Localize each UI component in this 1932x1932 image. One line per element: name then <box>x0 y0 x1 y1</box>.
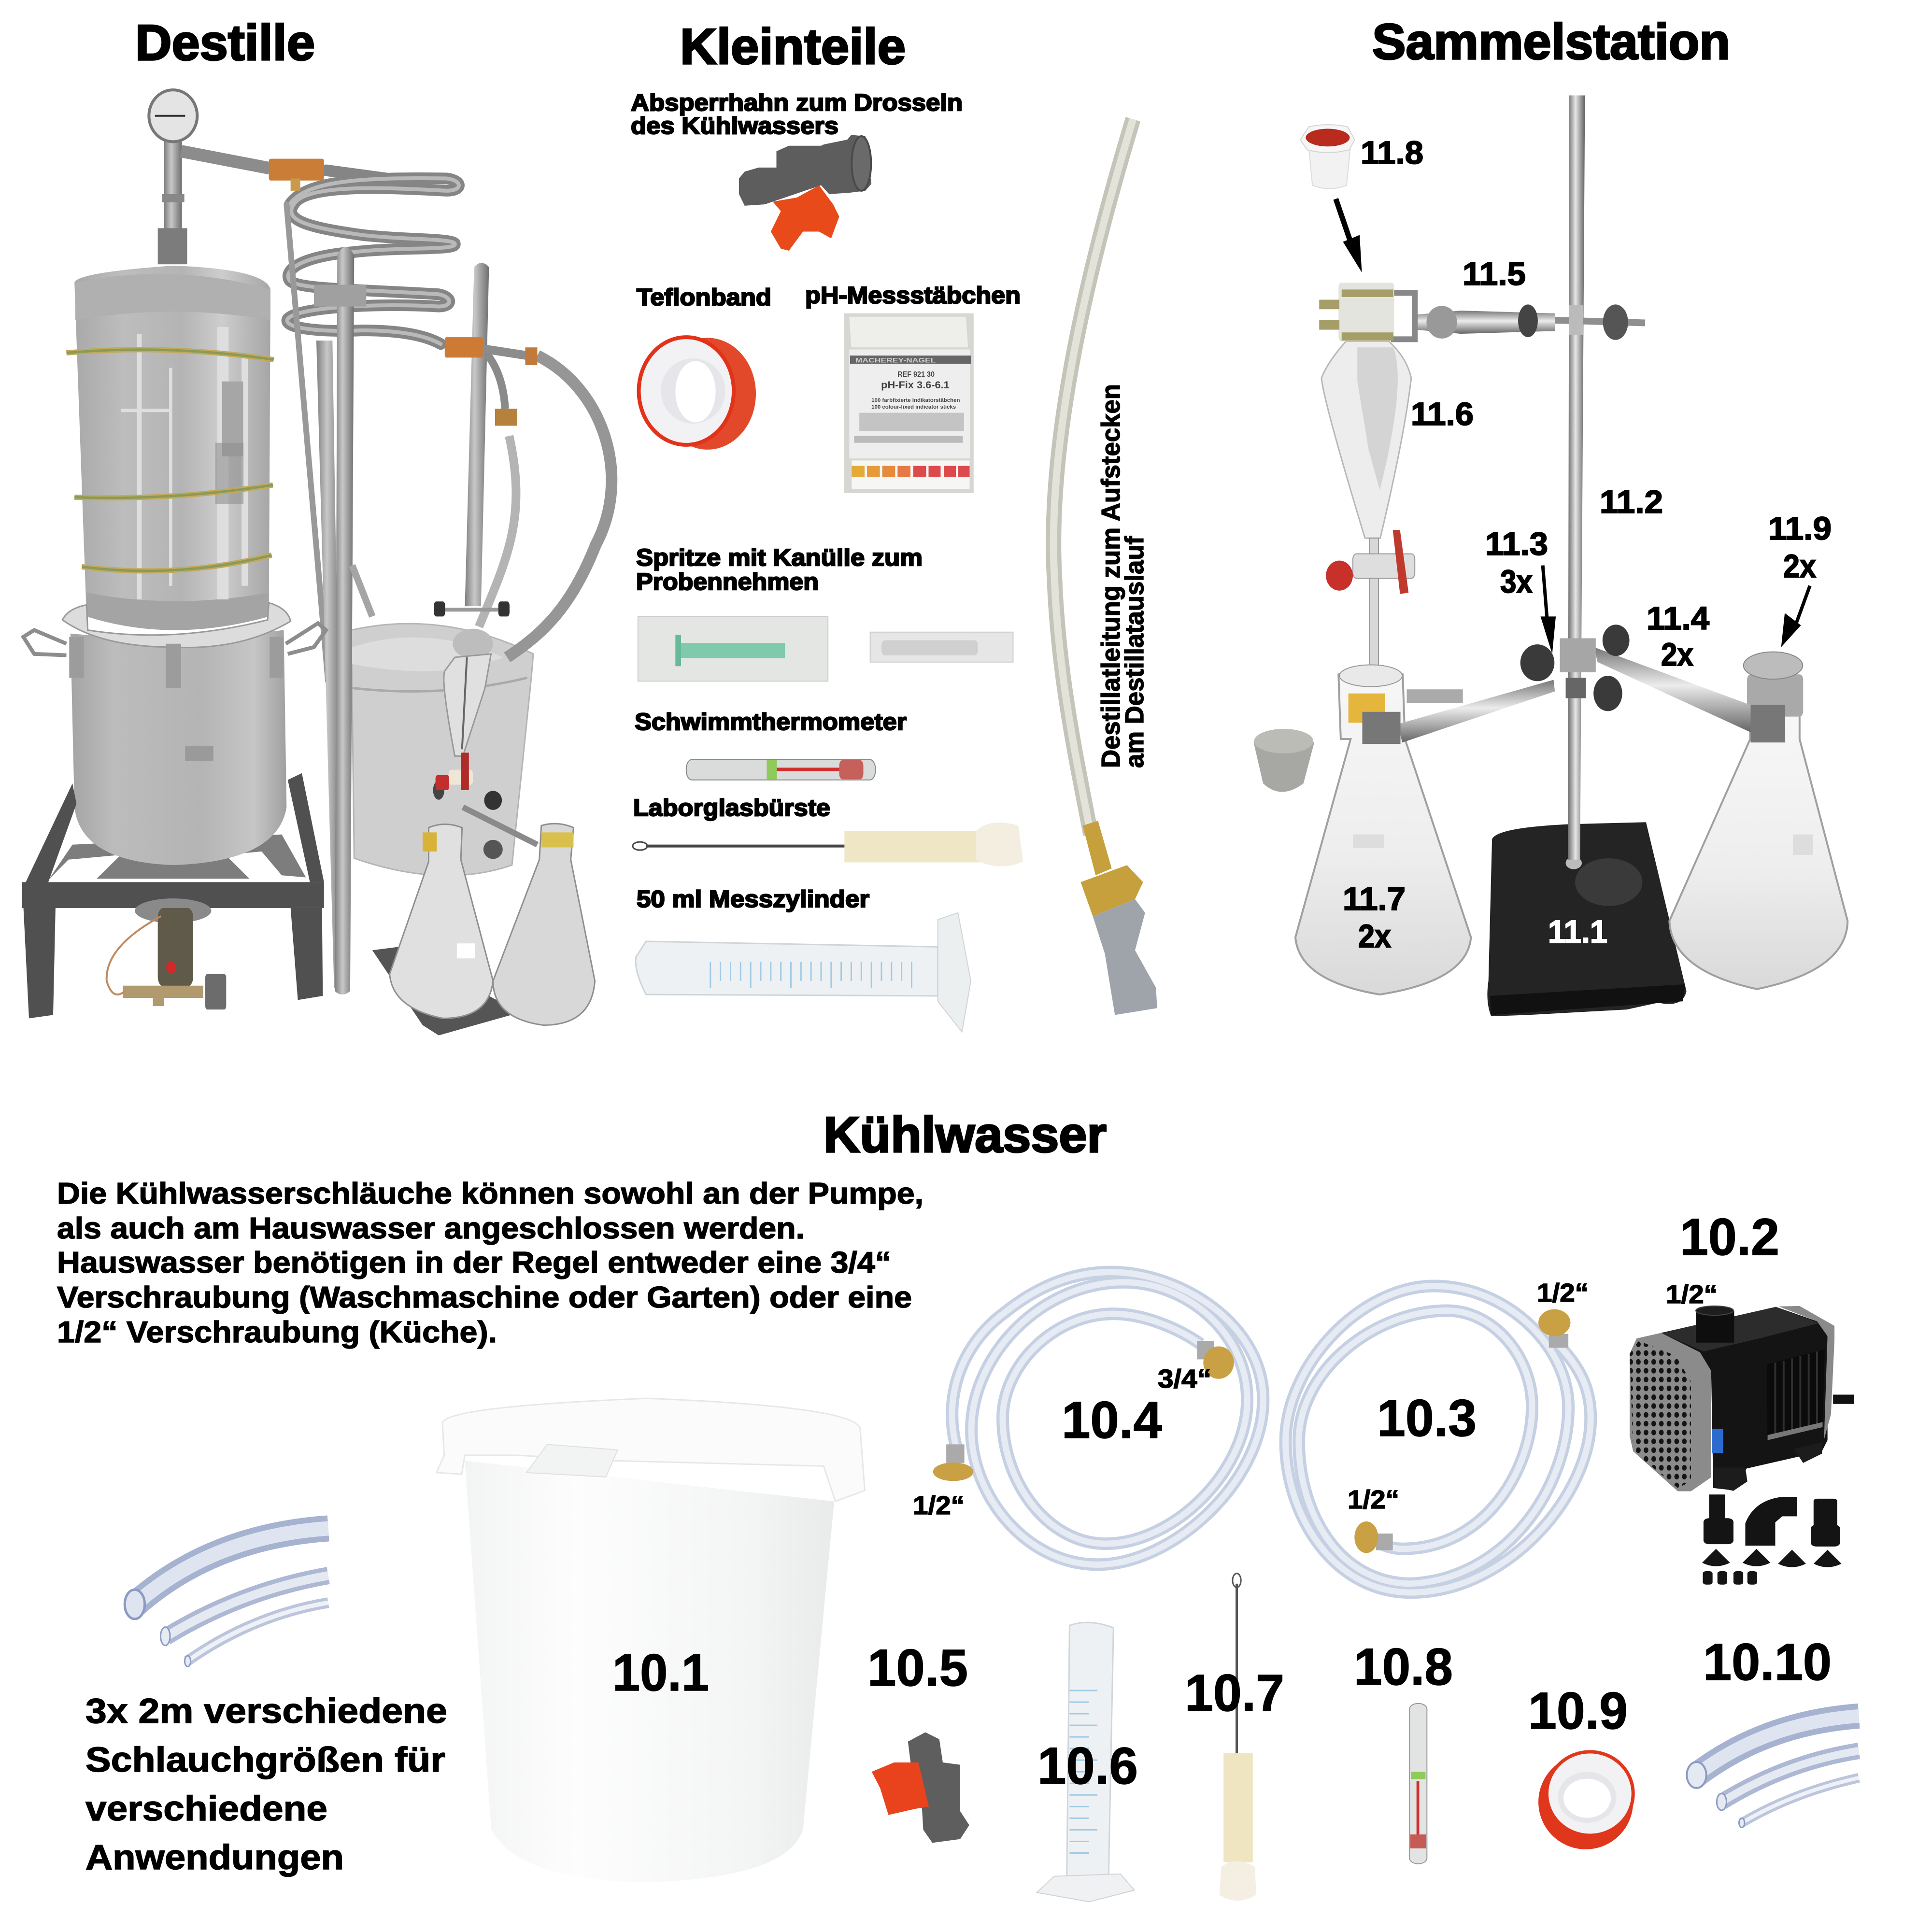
handles <box>23 630 66 655</box>
label: 11.7: 11.7 <box>1343 881 1406 917</box>
arrow 11.9 <box>1781 586 1810 647</box>
left arm <box>1398 680 1555 742</box>
label: Spritze: Spritze mit Kanülle zum <box>636 545 923 571</box>
panel: Sammelstation <box>1254 14 1847 1016</box>
text block: intro: Die Kühlwasserschläuche können sowohl an der Pumpe, <box>57 1177 923 1210</box>
brush 10.7 <box>1220 1574 1256 1901</box>
stand base <box>1487 822 1687 1016</box>
ropes <box>66 350 274 571</box>
label: 1/2 inch left: 1/2“ <box>913 1491 965 1520</box>
hoses <box>507 355 611 657</box>
clamp arm 11.5 <box>1416 311 1555 334</box>
teflon tape 10.9 <box>1538 1752 1633 1849</box>
label: Schwimmthermometer: Schwimmthermometer <box>635 709 907 735</box>
stand rear rails <box>48 835 306 880</box>
illustration: still assembly <box>22 90 611 1036</box>
label: 10.9: 10.9 <box>1528 1681 1628 1740</box>
label: 10.4: 10.4 <box>1062 1391 1162 1449</box>
label: pH-Messstaebchen: pH-Messstäbchen <box>805 283 1021 309</box>
brass coupling <box>1083 821 1112 875</box>
illustration: tubes and bucket <box>125 1398 865 1882</box>
pH test strips: pH-Fix 3.6-6.1 <box>881 379 950 391</box>
label: Destillatleitung: Destillatleitung zum Aufstecken <box>1096 384 1125 768</box>
label: 1/2 inch pump: 1/2“ <box>1666 1280 1718 1309</box>
pH test strips <box>844 313 974 493</box>
arrow to funnel <box>1336 199 1362 272</box>
stopcock <box>1353 554 1415 578</box>
label: 11.5: 11.5 <box>1463 256 1526 292</box>
label: 1/2 inch hose 10.3 bottom: 1/2“ <box>1348 1485 1399 1514</box>
text block: intro: Verschraubung (Waschmaschine oder Garten) oder eine <box>57 1281 912 1314</box>
label: des Kuehlwassers: des Kühlwassers <box>631 113 838 139</box>
pH test strips: 100 farbfixierte Indikatorstäbchen <box>871 397 960 403</box>
thermometer 10.8 <box>1409 1704 1427 1864</box>
bucket behind <box>351 624 533 876</box>
label: 11.1: 11.1 <box>1548 914 1607 950</box>
label: 10.3: 10.3 <box>1377 1389 1477 1447</box>
label: 2x top: 2x <box>1783 548 1816 584</box>
panel: Destille <box>22 15 611 1036</box>
label: 11.4: 11.4 <box>1647 600 1709 637</box>
label: 10.8: 10.8 <box>1354 1637 1453 1696</box>
label: 10.7: 10.7 <box>1185 1663 1284 1722</box>
label: Messzylinder: 50 ml Messzylinder <box>637 886 869 912</box>
base plate <box>372 947 511 1036</box>
distillate hose <box>1053 119 1133 835</box>
cooling coil <box>286 170 459 681</box>
pH test strips: MACHEREY-NAGEL <box>855 357 936 364</box>
tubes 10.10 <box>1687 1716 1859 1828</box>
label: line 2: Schlauchgrößen für <box>85 1741 445 1779</box>
label: 10.5: 10.5 <box>867 1638 968 1697</box>
tube samples <box>135 1528 328 1661</box>
fermentation bucket <box>465 1461 834 1882</box>
cylinder 10.6 <box>1037 1622 1135 1902</box>
label: 11.8: 11.8 <box>1361 135 1423 171</box>
tail fittings <box>445 337 483 357</box>
pump 10.2 <box>1630 1306 1854 1491</box>
label: 10.6: 10.6 <box>1037 1736 1138 1795</box>
text block: intro: 1/2“ Verschraubung (Küche). <box>57 1316 497 1349</box>
rubber stopper <box>1254 732 1314 792</box>
coil frame poles <box>316 341 343 988</box>
arrow 11.3 <box>1540 566 1556 654</box>
label: 2x mid: 2x <box>1661 637 1693 673</box>
separating funnel <box>1321 341 1411 538</box>
label: Probennehmen: Probennehmen <box>636 569 819 595</box>
label: 11.6: 11.6 <box>1411 396 1474 432</box>
hose 10.3 <box>1286 1286 1591 1592</box>
label: 3x 2m line 1: 3x 2m verschiedene <box>85 1692 447 1731</box>
label: am Destillatauslauf: am Destillatauslauf <box>1120 536 1149 768</box>
central clamp knobs <box>1520 625 1630 711</box>
label: 1/2 inch hose 10.3 top: 1/2“ <box>1537 1279 1589 1307</box>
brass fittings 10.4 <box>946 1444 965 1463</box>
valve 10.5 <box>872 1732 969 1843</box>
pump accessories <box>1702 1494 1841 1585</box>
column <box>74 266 270 630</box>
text block: intro <box>57 1177 923 1349</box>
label: 10.2: 10.2 <box>1680 1208 1779 1266</box>
syringe pack <box>638 616 828 681</box>
label: line 3: verschiedene <box>85 1790 327 1828</box>
pH test strips: 100 colour-fixed indicator sticks <box>871 404 956 410</box>
right flask <box>1669 715 1847 989</box>
measuring cylinder <box>636 941 938 996</box>
collection stand and funnel <box>433 601 510 859</box>
cup 11.8 <box>1308 144 1350 189</box>
brass fittings 10.3 <box>1549 1334 1568 1348</box>
label: 11.2: 11.2 <box>1600 484 1663 520</box>
needle pack <box>870 632 1013 662</box>
heading: Sammelstation: Sammelstation <box>1372 14 1730 70</box>
label: 10.10: 10.10 <box>1703 1633 1832 1691</box>
pot lid and pot <box>71 630 286 865</box>
right arm <box>1594 647 1751 732</box>
text block: intro: als auch am Hauswasser angeschlossen werden. <box>57 1212 805 1245</box>
pH test strips: REF 921 30 <box>897 369 935 379</box>
label: 3x: 3x <box>1500 564 1533 600</box>
label: 11.3: 11.3 <box>1485 526 1548 562</box>
shut-off valve <box>739 135 871 206</box>
label: Laborglasbuerste: Laborglasbürste <box>633 795 830 821</box>
heading: Kuehlwasser: Kühlwasser <box>824 1107 1107 1163</box>
hose 10.4 <box>952 1272 1263 1564</box>
text block: intro: Hauswasser benötigen in der Regel entweder eine 3/4“ <box>57 1246 891 1279</box>
label: line 4: Anwendungen <box>85 1838 344 1877</box>
label: Teflonband: Teflonband <box>637 284 771 311</box>
label: Absperrhahn: Absperrhahn zum Drosseln <box>631 90 963 116</box>
panel: Kleinteile <box>631 19 1157 1032</box>
heading: Destille: Destille <box>135 15 315 71</box>
label: 2x left: 2x <box>1358 918 1391 954</box>
label: 11.9: 11.9 <box>1768 511 1832 547</box>
gas burner stand <box>22 773 324 1018</box>
label: 3/4 inch: 3/4“ <box>1158 1364 1211 1393</box>
teflon tape <box>659 338 756 450</box>
label: 10.1: 10.1 <box>612 1643 709 1702</box>
panel: Kuehlwasser <box>57 1107 1859 1902</box>
burner valve <box>158 908 193 986</box>
support rod <box>1568 95 1585 860</box>
illustration: hoses, pump and parts <box>872 1272 1859 1902</box>
lab brush <box>646 845 845 848</box>
flasks <box>493 824 595 1025</box>
illustrations: small parts <box>633 119 1157 1032</box>
heading: Kleinteile: Kleinteile <box>680 19 906 75</box>
left flask <box>1295 669 1471 994</box>
floating thermometer <box>686 759 875 780</box>
illustration: collection stand <box>1254 95 1847 1016</box>
gauge and vapor pipe <box>164 140 182 256</box>
